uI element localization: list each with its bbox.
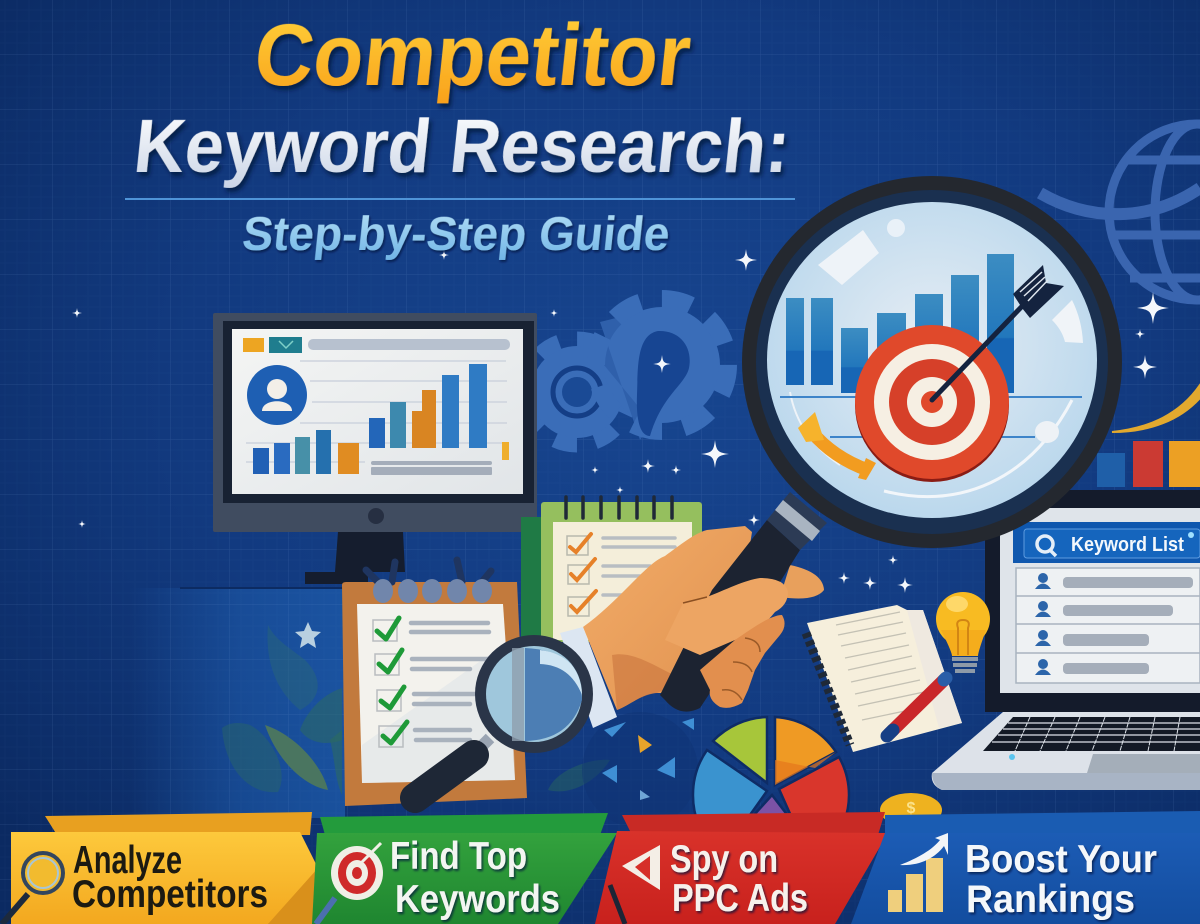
- metal collar: [767, 492, 827, 550]
- notepad checks: [567, 534, 596, 616]
- lens axis: [780, 396, 1082, 398]
- ribbon: analyze competitors: Competitors: [72, 873, 268, 916]
- label: Find Top: [390, 835, 527, 878]
- ribbon: boost your rankings: Rankings: [966, 878, 1135, 921]
- icon: rising bars: [888, 833, 948, 912]
- desktop monitor: [213, 313, 537, 584]
- lens: [767, 202, 1097, 518]
- title line: Keyword Research: Keyword Research:: [130, 104, 794, 189]
- orange arrow: [798, 412, 876, 480]
- keyword list header: [1013, 522, 1200, 563]
- shirt cuff: [560, 627, 617, 728]
- star badge: [295, 622, 321, 648]
- target: [855, 325, 1009, 482]
- check boxes: [373, 620, 403, 747]
- handle: [660, 520, 800, 712]
- leaves: [222, 625, 610, 795]
- blue slice: [693, 750, 767, 850]
- label: Boost Your: [965, 838, 1157, 881]
- light bulb: [936, 592, 990, 671]
- small lens detail: [525, 648, 582, 741]
- hand palm: [583, 526, 824, 710]
- palm: [583, 526, 752, 710]
- orange slice: [775, 717, 836, 785]
- red slice: [779, 757, 849, 846]
- green check marks: [377, 618, 407, 743]
- pen: [887, 678, 946, 736]
- keyword rows: [1016, 568, 1200, 683]
- list lines: [411, 623, 490, 740]
- label: Analyze: [73, 839, 182, 882]
- purple slice: [745, 795, 795, 825]
- icon: megaphone: [610, 845, 660, 924]
- monitor body: [213, 313, 537, 532]
- thumb: [665, 578, 788, 655]
- touchpad: [1087, 754, 1200, 773]
- title: [125, 5, 795, 261]
- screen header: [243, 337, 510, 353]
- screen gridlines: [246, 361, 507, 462]
- rim: [742, 176, 1122, 548]
- ribbon: boost your rankings: [851, 811, 1200, 924]
- ribbon: find top keywords: [312, 813, 617, 924]
- triangle cluster: [582, 712, 698, 828]
- paper: [357, 604, 515, 783]
- left gear: [524, 339, 630, 445]
- avatar icon: [247, 365, 307, 425]
- green slice: [713, 717, 767, 783]
- keyboard: [983, 717, 1200, 751]
- large bar chart: [369, 364, 509, 475]
- far finger: [780, 565, 824, 598]
- icon: magnifier: [2, 853, 63, 924]
- keyword list header: Keyword List: [1071, 534, 1184, 556]
- background notepad: [521, 497, 702, 642]
- sparkles: [72, 249, 1169, 593]
- subtitle: Step-by-Step Guide: [240, 207, 673, 261]
- pie chart: [693, 717, 849, 850]
- coin: [880, 793, 942, 827]
- label: Spy on: [670, 838, 778, 881]
- hand fingers: [665, 578, 788, 708]
- left clipboard with checklist: [342, 560, 527, 806]
- ribbon: spy on ppc ads: [595, 812, 888, 924]
- laptop base: [932, 712, 1200, 790]
- lens reflections: [790, 219, 1083, 497]
- spiral binding: [806, 633, 850, 745]
- arrow: [932, 265, 1064, 400]
- title line: Competitor: Competitor: [250, 5, 695, 104]
- monitor stand: [305, 532, 405, 584]
- small handle: [476, 738, 490, 752]
- small bar chart: [253, 430, 359, 474]
- ribbon: analyze competitors: [2, 812, 320, 924]
- clip rings: [366, 560, 492, 603]
- ribbon: spy on ppc ads: PPC Ads: [672, 877, 808, 920]
- laptop chart and ribbon: [1097, 385, 1200, 487]
- ribbon: find top keywords: Keywords: [395, 878, 560, 921]
- coin: $: [907, 800, 916, 817]
- title rule: [125, 198, 795, 200]
- row person icons: [1035, 573, 1051, 675]
- lens bar chart: [786, 254, 1014, 393]
- small rim: [475, 635, 593, 753]
- large magnifying glass: [660, 176, 1122, 712]
- small magnifying glass: [415, 635, 593, 798]
- globe: [1040, 124, 1200, 300]
- spiral notebook: [806, 605, 962, 752]
- spiral rings: [566, 497, 672, 518]
- gears: [524, 299, 728, 445]
- right gear: [596, 299, 728, 440]
- icon: target: [316, 843, 383, 924]
- lower fingers: [700, 615, 785, 708]
- bottom ribbons: [2, 811, 1200, 924]
- laptop: [932, 490, 1200, 790]
